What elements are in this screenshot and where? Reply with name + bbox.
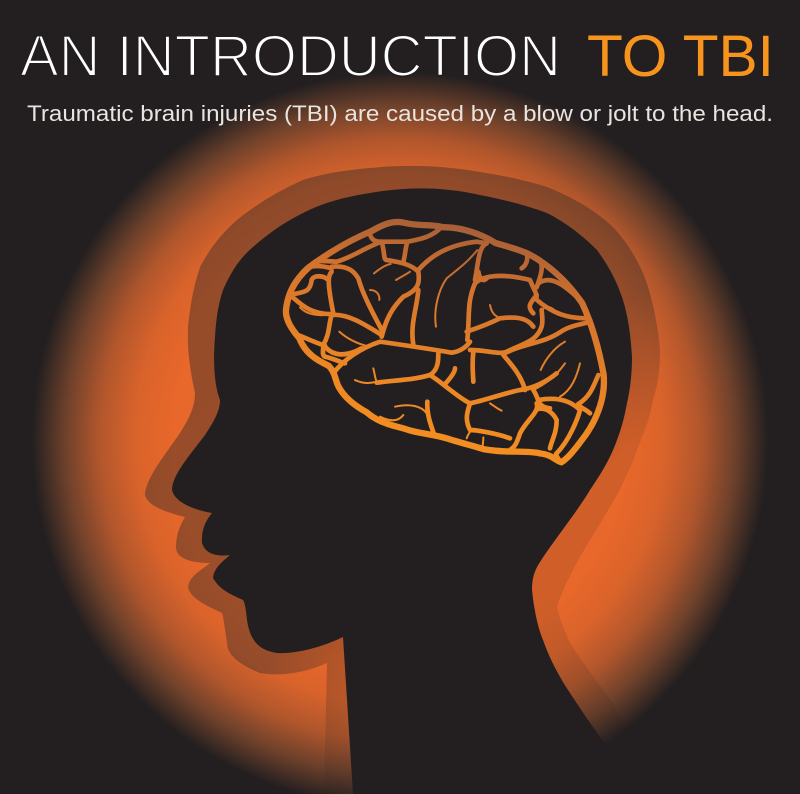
fine brain fissures [300,250,580,449]
icon: brain [283,219,607,466]
title [20,24,774,89]
head silhouette [172,188,640,794]
title: white part: AN INTRODUCTION [20,24,561,89]
title: orange part: TO TBI [587,24,774,89]
brain outline [283,219,607,466]
main brain veins [290,227,598,463]
subtitle: Traumatic brain injuries (TBI) are caused by a blow or jolt to the head. [27,101,773,126]
head shadow band [145,166,660,794]
